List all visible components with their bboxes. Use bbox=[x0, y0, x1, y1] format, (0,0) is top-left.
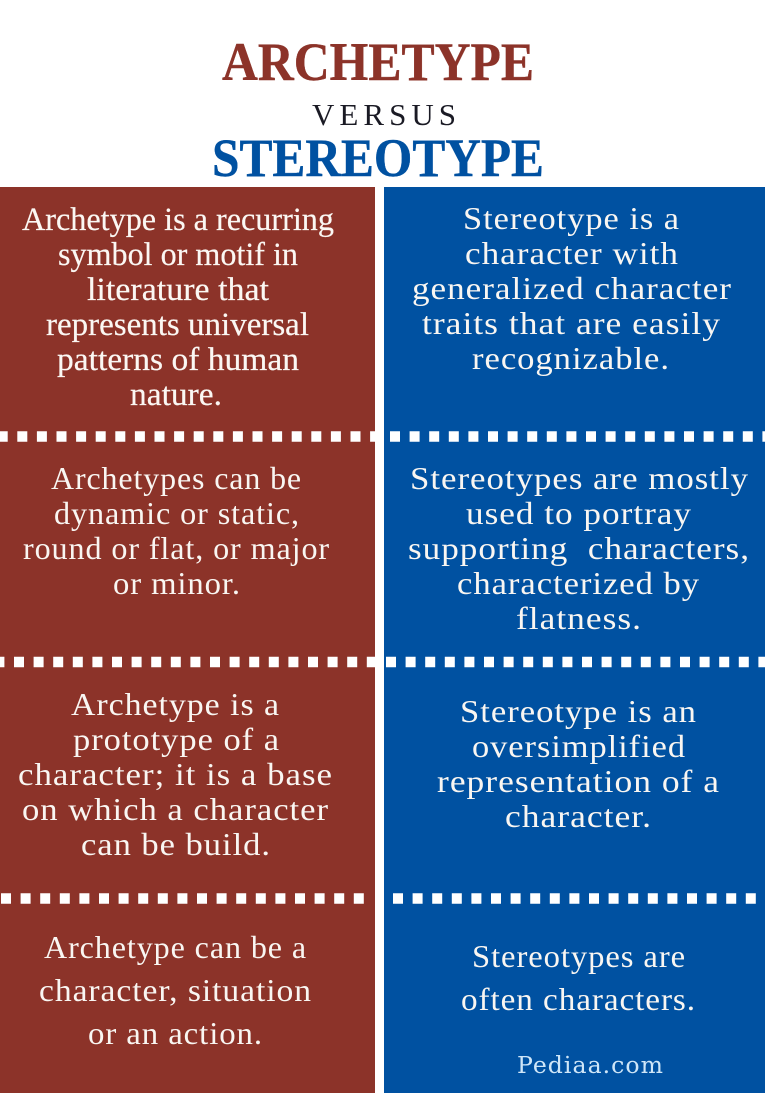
text: stereotype usage: characterized by bbox=[457, 565, 700, 601]
text: stereotype definition: Stereotype is a bbox=[463, 200, 680, 236]
text: archetype definition: nature. bbox=[130, 377, 222, 413]
text: archetype prototype: prototype of a bbox=[73, 721, 280, 757]
text: archetype definition: represents universal bbox=[46, 307, 309, 343]
text: archetype prototype: can be build. bbox=[81, 826, 271, 862]
text: stereotype forms: Stereotypes are bbox=[472, 938, 686, 974]
text: stereotype usage: used to portray bbox=[466, 495, 692, 531]
text: stereotype usage: supporting characters, bbox=[408, 530, 750, 566]
text: archetype types: or minor. bbox=[113, 565, 241, 601]
text: archetype forms: or an action. bbox=[88, 1015, 263, 1051]
text: stereotype representation: representation of a bbox=[437, 763, 720, 799]
heading: versus: VERSUS bbox=[312, 97, 456, 132]
text: archetype forms: Archetype can be a bbox=[44, 929, 307, 965]
text: stereotype representation: oversimplified bbox=[472, 728, 686, 764]
text: archetype definition: Archetype is a recurring bbox=[22, 202, 334, 238]
text: archetype types: round or flat, or major bbox=[23, 530, 330, 566]
text: stereotype forms: often characters. bbox=[461, 981, 696, 1017]
text: stereotype representation bbox=[437, 693, 720, 834]
heading: archetype: ARCHETYPE bbox=[222, 32, 534, 92]
text: archetype forms: character, situation bbox=[39, 972, 312, 1008]
text: stereotype usage bbox=[408, 460, 750, 636]
text: stereotype forms bbox=[461, 938, 696, 1017]
text: stereotype representation: Stereotype is an bbox=[460, 693, 697, 729]
text: stereotype definition: recognizable. bbox=[472, 340, 670, 376]
text: stereotype definition: character with bbox=[465, 235, 679, 271]
text: archetype definition: symbol or motif in bbox=[58, 237, 298, 273]
text: archetype prototype: on which a character bbox=[22, 791, 329, 827]
title block bbox=[212, 32, 544, 188]
text: archetype prototype bbox=[18, 686, 333, 862]
text: stereotype definition: generalized character bbox=[412, 270, 732, 306]
dotted dividers bbox=[0, 436, 765, 898]
text: stereotype definition bbox=[412, 200, 732, 376]
text: archetype prototype: Archetype is a bbox=[71, 686, 280, 722]
text: stereotype usage: Stereotypes are mostly bbox=[410, 460, 749, 496]
text: stereotype usage: flatness. bbox=[516, 600, 642, 636]
text: stereotype definition: traits that are easily bbox=[422, 305, 721, 341]
text: archetype types: Archetypes can be bbox=[51, 460, 302, 496]
panel: archetype column background bbox=[0, 187, 375, 1093]
text: stereotype representation: character. bbox=[505, 798, 652, 834]
text: archetype prototype: character; it is a base bbox=[18, 756, 333, 792]
logo: Pediaa.com: Pediaa.com bbox=[517, 1053, 664, 1079]
text: archetype definition: literature that bbox=[87, 272, 269, 308]
text: archetype definition bbox=[22, 202, 334, 413]
text: archetype types: dynamic or static, bbox=[54, 495, 300, 531]
heading: stereotype: STEREOTYPE bbox=[212, 128, 544, 188]
text: archetype types bbox=[23, 460, 330, 601]
text: archetype definition: patterns of human bbox=[57, 342, 299, 378]
panel: stereotype column background bbox=[384, 187, 765, 1093]
text: archetype forms bbox=[39, 929, 312, 1051]
